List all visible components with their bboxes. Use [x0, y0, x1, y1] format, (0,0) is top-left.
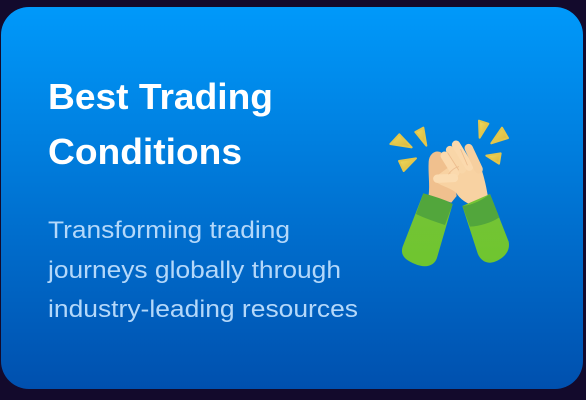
icon: finger creases	[448, 149, 467, 174]
icon: right sparks	[479, 121, 508, 164]
icon: back hand	[429, 151, 457, 203]
heading: Best Trading Conditions: Best Trading	[48, 76, 273, 117]
icon: right sleeve	[462, 194, 509, 263]
text block: description: Transforming trading	[48, 217, 290, 244]
text block: description	[47, 217, 358, 323]
icon: fingers	[437, 145, 479, 179]
icon: front hand	[433, 145, 488, 206]
icon: high five hands	[390, 121, 509, 266]
icon: left sleeve	[402, 193, 453, 266]
heading: Best Trading Conditions: Conditions	[48, 131, 242, 172]
text block: description: journeys globally through	[47, 257, 341, 284]
icon: left sparks	[390, 128, 426, 171]
text block: description: industry-leading resources	[48, 296, 358, 323]
heading: Best Trading Conditions	[48, 76, 273, 172]
icon: palm	[433, 163, 488, 206]
